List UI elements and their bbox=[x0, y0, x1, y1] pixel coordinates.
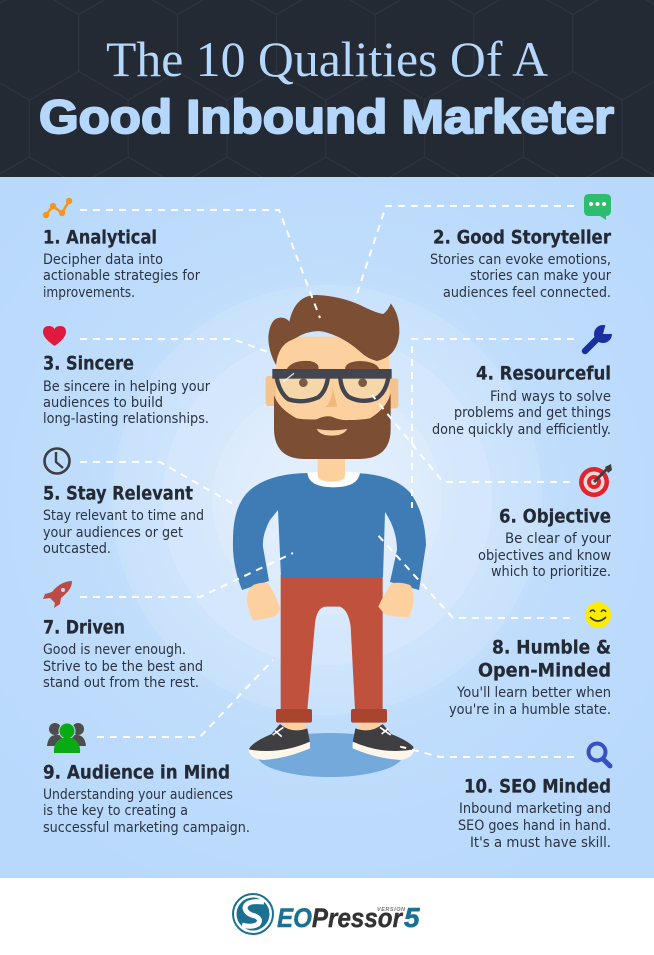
item 10: seo minded: It's a must have skill. bbox=[470, 835, 611, 851]
item 5: stay relevant: your audiences or get bbox=[43, 525, 183, 541]
item 7: driven: stand out from the rest. bbox=[43, 675, 199, 691]
legs and shoes bbox=[248, 575, 414, 760]
icon: magnifier bbox=[588, 744, 610, 766]
title line 1: The 10 Qualities Of A bbox=[106, 31, 548, 87]
item 3: sincere: 3. Sincere bbox=[43, 352, 134, 374]
item 1: analytical: 1. Analytical bbox=[43, 226, 157, 248]
title line 2: Good Inbound Marketer bbox=[39, 90, 614, 143]
item 8: humble and open-minded: You'll learn better when bbox=[456, 685, 611, 701]
item 8: humble and open-minded: 8. Humble & bbox=[492, 636, 611, 658]
item 8: humble and open-minded: Open-Minded bbox=[478, 660, 611, 682]
item 9: audience in mind: successful marketing campaign. bbox=[43, 820, 250, 836]
item 1: analytical: Decipher data into bbox=[43, 252, 163, 268]
item 2: good storyteller: audiences feel connected. bbox=[443, 285, 611, 301]
item 3: sincere bbox=[43, 326, 210, 427]
character bbox=[233, 295, 426, 777]
item 3: sincere: audiences to build bbox=[43, 395, 163, 411]
hands bbox=[247, 583, 414, 621]
item 5: stay relevant bbox=[43, 448, 204, 557]
logo version label: VERSION bbox=[377, 907, 406, 913]
item 6: objective: objectives and know bbox=[478, 548, 611, 564]
item 7: driven: Strive to be the best and bbox=[43, 659, 203, 675]
item 6: objective: which to prioritize. bbox=[491, 564, 611, 580]
sweater bbox=[233, 473, 426, 590]
item 10: seo minded: SEO goes hand in hand. bbox=[458, 818, 611, 834]
icon: target bbox=[579, 464, 612, 497]
item 9: audience in mind: is the key to creating a bbox=[43, 803, 188, 819]
item 4: resourceful: 4. Resourceful bbox=[476, 362, 611, 384]
item 5: stay relevant: 5. Stay Relevant bbox=[43, 482, 193, 504]
item 10: seo minded bbox=[458, 744, 611, 851]
main blue panel with concentric circles bbox=[0, 177, 654, 878]
icon: rocket bbox=[43, 581, 72, 608]
item 6: objective bbox=[478, 464, 612, 580]
item 2: good storyteller: stories can make your bbox=[470, 268, 611, 284]
item 6: objective: Be clear of your bbox=[505, 531, 611, 547]
item 4: resourceful: Find ways to solve bbox=[490, 389, 611, 405]
ground shadow bbox=[257, 733, 403, 777]
icon: chat bubble bbox=[584, 194, 611, 220]
item 9: audience in mind: 9. Audience in Mind bbox=[43, 762, 230, 784]
item 3: sincere: Be sincere in helping your bbox=[43, 379, 210, 395]
dashed connector lines bbox=[80, 206, 574, 757]
item 10: seo minded: 10. SEO Minded bbox=[464, 776, 611, 798]
item 9: audience in mind: Understanding your audiences bbox=[43, 787, 233, 803]
item 7: driven bbox=[43, 581, 203, 691]
icon: smiley bbox=[585, 602, 611, 628]
item 3: sincere: long-lasting relationships. bbox=[43, 411, 209, 427]
footer with logo bbox=[0, 878, 654, 955]
item 7: driven: 7. Driven bbox=[43, 616, 125, 638]
item 7: driven: Good is never enough. bbox=[43, 642, 186, 658]
item 1: analytical: improvements. bbox=[43, 285, 135, 301]
head bbox=[266, 295, 399, 487]
logo emblem bbox=[233, 894, 273, 934]
item 10: seo minded: Inbound marketing and bbox=[459, 801, 611, 817]
item 5: stay relevant: Stay relevant to time and bbox=[43, 508, 204, 524]
header band bbox=[0, 0, 654, 177]
icon: people bbox=[47, 723, 86, 753]
item 5: stay relevant: outcasted. bbox=[43, 541, 111, 557]
item 8: humble and open-minded bbox=[449, 602, 611, 718]
icon: heart bbox=[43, 326, 66, 346]
item 6: objective: 6. Objective bbox=[499, 506, 611, 528]
icon: wrench bbox=[585, 323, 615, 351]
logo wordmark: EOPressor bbox=[277, 903, 403, 933]
item 2: good storyteller: 2. Good Storyteller bbox=[433, 226, 612, 248]
item 4: resourceful: done quickly and efficiently. bbox=[432, 422, 611, 438]
item 2: good storyteller bbox=[430, 194, 612, 301]
item 2: good storyteller: Stories can evoke emotions, bbox=[430, 252, 611, 268]
item 4: resourceful bbox=[432, 323, 615, 438]
icon: line chart bbox=[43, 198, 72, 218]
icon: clock bbox=[44, 448, 70, 474]
item 8: humble and open-minded: you're in a humble state. bbox=[449, 702, 611, 718]
item 4: resourceful: problems and get things bbox=[454, 405, 611, 421]
item 1: analytical: actionable strategies for bbox=[43, 268, 200, 284]
item 9: audience in mind bbox=[43, 723, 250, 836]
item 1: analytical bbox=[43, 198, 200, 301]
logo version 5: 5 bbox=[404, 902, 420, 933]
